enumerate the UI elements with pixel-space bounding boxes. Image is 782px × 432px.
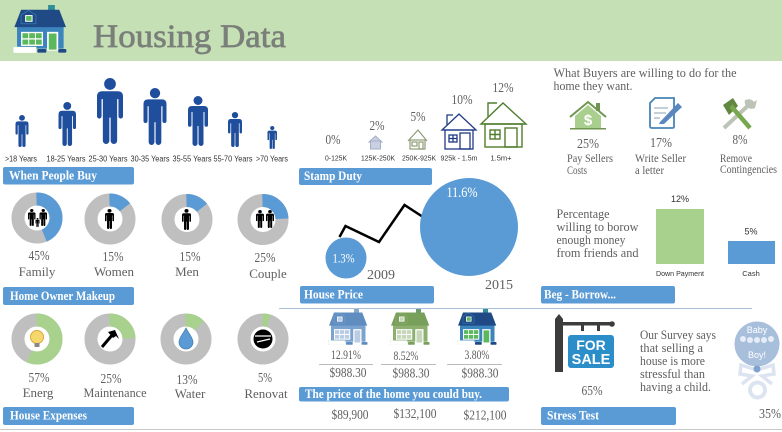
donut: women (91, 200, 135, 279)
stamp duty percentages (326, 81, 514, 148)
panel: home owner makeup (3, 199, 287, 305)
age labels: 35-55 Years (172, 154, 212, 164)
age labels: 30-35 Years (130, 154, 170, 164)
panel: stamp duty (299, 81, 526, 185)
rates (319, 348, 502, 382)
stat: write seller: a letter (635, 163, 664, 177)
icon: wrench and hammer (723, 98, 757, 128)
bar chart: Down Payment (656, 269, 705, 278)
survey text: house is more (640, 353, 705, 368)
icon: green house (390, 309, 430, 345)
bar chart: 12% (671, 194, 689, 204)
donut: men: Men (175, 264, 199, 279)
panel: house expenses (3, 320, 288, 425)
donut: renovation: Renovat (244, 386, 288, 401)
stat: pay sellers: Pay Sellers (567, 151, 613, 165)
bubble: 2009 (326, 238, 366, 278)
donut: maintenance: Maintenance (84, 385, 147, 400)
age labels: >18 Years (5, 154, 37, 164)
donut: couple: 25% (254, 251, 276, 266)
panel: buyers willing (554, 65, 777, 177)
panel: stress test (541, 314, 781, 425)
rates: $988.30 (462, 366, 498, 382)
icon: baby rattle: Baby (747, 325, 768, 335)
stat: write seller: Write Seller (635, 151, 686, 165)
donut: energy (18, 320, 56, 400)
icon: navy house (457, 309, 496, 345)
heading: price of the home: The price of the home you could buy. (305, 387, 482, 401)
icon: house 2% (369, 136, 382, 149)
bar chart (656, 194, 775, 278)
icon: for sale sign (555, 314, 615, 372)
bubble: 2009: 1.3% (332, 250, 355, 266)
donut: family (18, 199, 56, 279)
icon: blue house (328, 309, 368, 345)
intro text line 2: home they want. (554, 78, 632, 93)
paragraph (556, 206, 639, 260)
stat: pay sellers: Costs (567, 163, 587, 177)
age pictogram chart (16, 78, 277, 149)
survey text: that selling a (640, 340, 703, 355)
icon: house 12% (481, 103, 526, 147)
heading: stress test (541, 407, 676, 425)
heading: when people buy: When People Buy (9, 168, 98, 182)
heading: when people buy (3, 167, 134, 184)
donut: water: 13% (176, 373, 198, 388)
stat: pay sellers: 25% (577, 137, 599, 152)
donut: energy: 57% (28, 371, 50, 386)
icon: for sale sign: SALE (572, 352, 611, 368)
donut: couple (244, 200, 287, 281)
rates: 8.52% (394, 349, 418, 363)
survey text: stressful than (640, 366, 705, 381)
survey text (640, 327, 716, 394)
year labels (367, 268, 513, 293)
year labels: 2009 (367, 268, 395, 283)
donut: energy: Energ (23, 385, 54, 400)
donut: family: Family (19, 264, 56, 279)
icon: house 5% (408, 130, 427, 149)
paragraph: Percentage (556, 206, 610, 221)
donut: maintenance: 25% (100, 372, 122, 387)
year labels: 2015 (485, 278, 513, 293)
donut: couple: Couple (249, 266, 287, 281)
paragraph: enough money (556, 232, 626, 247)
donut: men (168, 200, 206, 279)
heading: beg borrow: Beg - Borrow... (544, 288, 616, 302)
donut: renovation (244, 320, 288, 401)
stamp duty labels (325, 154, 512, 162)
panel: beg borrow (541, 194, 775, 304)
prices (332, 407, 506, 424)
age labels: >70 Years (256, 154, 288, 164)
donut: water: Water (175, 386, 206, 401)
heading: house expenses: House Expenses (10, 408, 87, 422)
heading: stamp duty (299, 168, 432, 185)
heading: home owner makeup: Home Owner Makeup (10, 289, 115, 303)
line connector (340, 205, 423, 242)
icon: baby rattle: Boy! (748, 350, 766, 360)
heading: stress test: Stress Test (547, 408, 600, 422)
stamp duty labels: 925k - 1.5m (440, 154, 478, 162)
age labels: 55-70 Years (214, 154, 252, 164)
stat: remove contingencies: Remove (720, 153, 752, 165)
heading: stamp duty: Stamp Duty (304, 169, 363, 183)
donut: women: 15% (102, 250, 124, 265)
stamp duty labels: 250K-925K (402, 154, 436, 162)
stat: remove contingencies: 8% (732, 133, 748, 148)
stamp duty percentages: 5% (410, 110, 426, 125)
rates: 12.91% (331, 348, 361, 362)
header banner (0, 0, 782, 61)
bar chart: 5% (744, 226, 758, 236)
heading: beg borrow (541, 286, 675, 304)
survey text: having a child. (640, 379, 711, 394)
icon: dollar house: $ (584, 112, 593, 129)
donut: women: Women (94, 264, 135, 279)
rates: $988.30 (392, 366, 430, 382)
stamp duty labels: 0-125K (325, 154, 347, 162)
stamp duty percentages: 12% (492, 81, 514, 96)
icon: header house (13, 5, 66, 53)
heading: house price: House Price (304, 288, 363, 302)
prices: $212,100 (464, 408, 506, 424)
donut: water (167, 320, 206, 401)
stat: write seller: 17% (650, 136, 672, 151)
stat: 65%: 65% (582, 384, 603, 399)
icon: for sale sign: FOR (576, 337, 606, 353)
bubble: 2015 (420, 178, 518, 276)
panel: when people buy (3, 78, 288, 184)
stamp duty percentages: 10% (452, 93, 473, 108)
bubble: 2015: 11.6% (446, 185, 478, 201)
rates: $988.30 (330, 366, 366, 381)
stat: write seller (635, 136, 686, 177)
heading: house price (300, 286, 434, 304)
panel: house price (300, 178, 518, 304)
stat: pay sellers (567, 137, 613, 177)
icon: baby rattle (734, 322, 780, 398)
stamp duty labels: 125K-250K (361, 154, 395, 162)
icon: dollar house (570, 102, 606, 130)
heading: house expenses (3, 407, 134, 425)
age labels (5, 154, 288, 164)
stamp duty labels: 1.5m+ (490, 154, 512, 162)
title: Housing Data (93, 19, 286, 55)
paragraph: willing to borow (556, 219, 639, 234)
stat: remove contingencies (720, 133, 777, 176)
donut: renovation: 5% (258, 371, 272, 386)
donut: maintenance (84, 320, 147, 400)
stamp duty percentages: 2% (370, 119, 385, 134)
panel: price of home (299, 309, 509, 424)
icon: house 10% (442, 114, 476, 149)
intro text: What Buyers are willing to do for the (554, 65, 737, 80)
rates: 3.80% (464, 348, 490, 362)
stamp duty percentages: 0% (326, 133, 341, 148)
paragraph: from friends and (556, 245, 639, 260)
age labels: 25-30 Years (88, 154, 128, 164)
icon: letter and pen (650, 98, 682, 128)
age labels: 18-25 Years (46, 154, 86, 164)
prices: $132,100 (394, 407, 436, 422)
donut: men: 15% (180, 250, 201, 265)
prices: $89,900 (332, 408, 368, 423)
bar chart: Cash (742, 269, 760, 278)
survey text: Our Survey says (640, 327, 716, 342)
donut: family: 45% (28, 249, 50, 264)
